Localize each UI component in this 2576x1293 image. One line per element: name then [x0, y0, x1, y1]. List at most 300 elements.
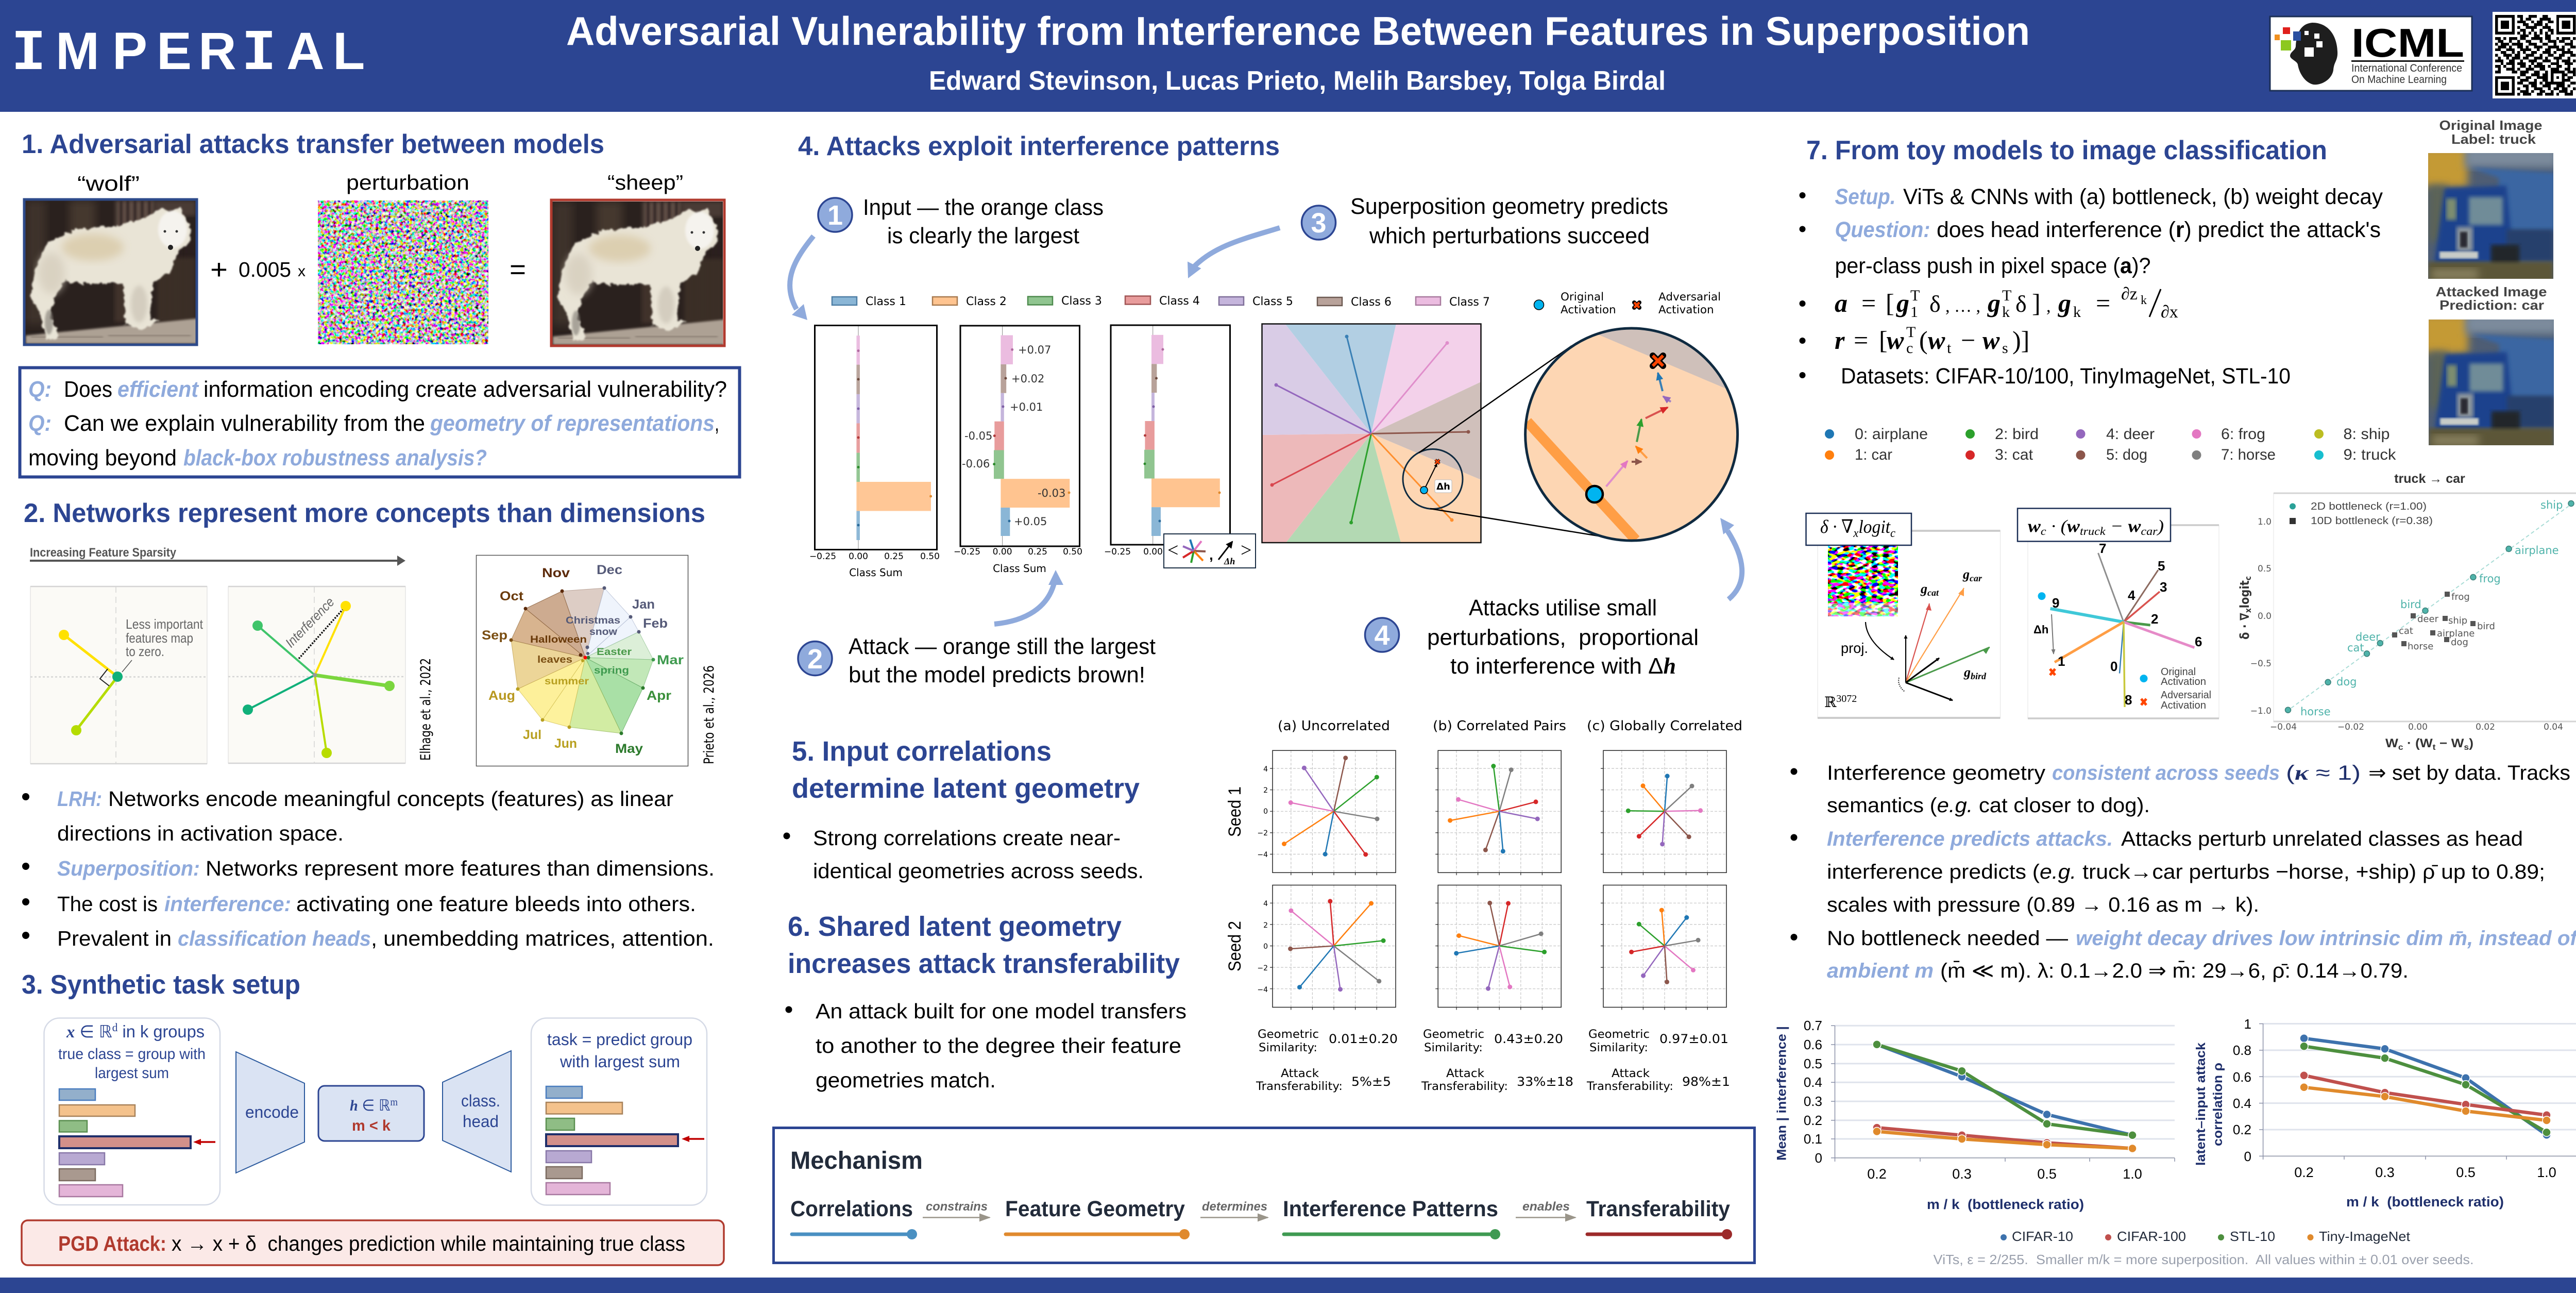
bar chart: attack: [954, 326, 1082, 575]
card: input groups: [44, 1018, 220, 1205]
logo: ICML: On Machine Learning: [2351, 74, 2447, 86]
stats: globally correlated: Similarity:: [1589, 1042, 1648, 1054]
y ticks: 4: [1263, 765, 1268, 774]
legend: activations: Original: [1561, 291, 1604, 304]
bar chart: attack: Class Sum: [993, 562, 1046, 575]
step 2 text: but the model predicts brown!: [849, 662, 1145, 687]
formula: a: g: [1896, 289, 1909, 317]
label wolf: “wolf”: [77, 172, 140, 195]
legend: classes: Class 4: [1159, 295, 1200, 308]
scatter plot: truck to car: δ · ∇: [2238, 609, 2252, 640]
y ticks: −2: [1257, 964, 1268, 972]
formula: a: k: [2141, 294, 2147, 307]
diagram: gradient projection: g: [1964, 665, 1971, 680]
callout: research questions: geometry of representations: [430, 411, 715, 436]
diagram: gradient projection: c: [1890, 527, 1895, 540]
legend: CIFAR classes: 4: deer: [2106, 426, 2155, 443]
stats: uncorrelated: Transferability:: [1256, 1080, 1343, 1093]
scatter plot: truck to car: horse: [2300, 706, 2331, 718]
bar chart: attack: -0.03: [1038, 487, 1065, 499]
diagram: head weights star: Δh: [2033, 623, 2048, 636]
setup bullets: Setup.: [1835, 184, 1896, 209]
diagram: gradient projection: [1806, 513, 2000, 718]
diagram: gradient projection: logit: [1858, 516, 1891, 537]
bar chart: attacked model: 0.00: [1143, 547, 1163, 557]
formula: a: ,: [2046, 297, 2050, 316]
chart: calendar feature geometry: Mar: [657, 653, 684, 667]
step 3 text: which perturbations succeed: [1369, 223, 1650, 248]
callout: PGD attack: PGD Attack:: [58, 1232, 166, 1255]
logo: Imperial wordmark: P: [112, 22, 147, 80]
bullet list: concepts: activating one feature bleeds into others.: [296, 892, 696, 916]
step 2 text: [849, 634, 1156, 687]
logo: ICML: [2270, 16, 2472, 91]
diagram: gradient projection: 3072: [1836, 693, 1857, 704]
formula: r: s: [2002, 340, 2008, 357]
scatter plot: truck to car: truck → car: [2394, 472, 2465, 486]
logo: Imperial wordmark: E: [157, 22, 192, 80]
formula: r: )]: [2012, 326, 2029, 355]
classification head trapezoid: class.: [461, 1092, 500, 1110]
findings bullets: ⇒ set by data. Tracks: [2368, 762, 2570, 784]
formula: a: ∂x: [2161, 303, 2178, 322]
legend: datasets: Tiny-ImageNet: [2319, 1229, 2411, 1244]
chart: calendar feature geometry: Jan: [632, 597, 655, 612]
panel 5: input correlations: [783, 736, 1144, 883]
callout: research questions: black-box robustness analysis?: [183, 445, 487, 471]
formula: a: δ: [2015, 291, 2027, 317]
diagram: gradient projection: δ · ∇: [1820, 516, 1856, 537]
line chart: attack correlation: 0.3: [2375, 1165, 2395, 1180]
chart: calendar feature geometry: Christmas: [566, 615, 620, 626]
line chart: attack correlation: correlation ρ: [2211, 1063, 2225, 1146]
stats: uncorrelated: 5%±5: [1351, 1074, 1391, 1089]
diagram: five features in superposition: Interference: [282, 594, 337, 650]
diagram: head weights star: car: [2141, 525, 2158, 538]
arrow 3: [1188, 228, 1280, 278]
stats: uncorrelated: Attack: [1281, 1067, 1319, 1080]
bar chart: input: Class Sum: [849, 566, 903, 579]
legend: classes: Class 2: [966, 295, 1007, 308]
formula: a: [: [1886, 289, 1894, 317]
diagram: head weights star: w: [2128, 517, 2141, 536]
formula: r: (: [1919, 326, 1928, 355]
line chart: attack correlation: 1: [2244, 1016, 2251, 1032]
formula: a: k: [2002, 304, 2010, 321]
heading 6: increases attack transferability: [788, 948, 1180, 979]
callout: research questions: Does: [64, 377, 112, 402]
diagram: head weights star: 3: [2160, 579, 2167, 595]
formula: r: =: [1854, 326, 1868, 355]
diagram: two-dimensional features: features map: [126, 630, 193, 646]
legend: CIFAR classes: 2: bird: [1995, 426, 2039, 443]
y ticks: −4: [1257, 851, 1268, 859]
scatter plot: truck to car: cat: [2399, 626, 2413, 636]
bar chart: input: −0.25: [809, 551, 836, 562]
legend: datasets: [2001, 1229, 2411, 1244]
bar chart: input: 0.50: [920, 551, 940, 562]
formula: r: T: [1906, 324, 1916, 341]
step: transferability: Transferability: [1586, 1197, 1730, 1221]
legend: datasets: CIFAR-100: [2117, 1229, 2186, 1244]
line chart: attack correlation: 0.6: [2233, 1069, 2251, 1085]
callout: research questions: Q:: [28, 411, 52, 436]
diagram: gradient projection: g: [1963, 567, 1970, 582]
column titles: [1278, 718, 1742, 734]
image: perturbation noise: [318, 200, 488, 344]
panel 4: attacks exploit interference: [790, 131, 1762, 687]
line chart: mean interference: 0.7: [1804, 1018, 1822, 1033]
scatter plot: truck to car: dog: [2451, 637, 2468, 648]
findings bullets: [1791, 761, 2576, 982]
scatter plot: truck to car: − W: [2436, 736, 2464, 750]
label perturbation: perturbation: [346, 171, 469, 194]
card: input groups: in k groups: [117, 1022, 205, 1041]
latent box: [318, 1086, 424, 1141]
line chart: attack correlation: 0: [2244, 1149, 2251, 1164]
heading 5: [792, 736, 1140, 804]
formula: a: ]: [2032, 289, 2041, 317]
scatter plot: truck to car: airplane: [2437, 628, 2475, 639]
callout: research questions: [20, 368, 740, 477]
scatter plot: truck to car: −0.5: [2250, 659, 2272, 669]
bullet list: concepts: The cost is: [57, 892, 158, 916]
diagram: head weights star: truck: [2080, 525, 2106, 538]
step 4 badge: [1365, 618, 1399, 652]
scatter plot: truck to car: −1.0: [2250, 706, 2272, 716]
scatter plot: truck to car: [2238, 472, 2576, 752]
bullet list: concepts: Superposition:: [57, 857, 200, 880]
callout: research questions: Can we explain vulnerability from the: [64, 411, 425, 436]
step: transferability: [1586, 1197, 1732, 1239]
inner product formula box: [1164, 534, 1256, 568]
legend: datasets: CIFAR-10: [2012, 1229, 2073, 1244]
y ticks: 0: [1263, 943, 1268, 951]
panel: seed geometry grid: [1225, 718, 1742, 1093]
chart: calendar feature geometry: Dec: [597, 563, 622, 577]
callout: PGD attack: [22, 1220, 724, 1265]
scatter plot: truck to car: 2D bottleneck (r=1.00): [2311, 501, 2427, 512]
logo: Imperial wordmark: L: [333, 22, 365, 80]
scatter plot: truck to car: 10D bottleneck (r=0.38): [2311, 515, 2433, 527]
classification head trapezoid: head: [463, 1112, 499, 1131]
findings bullets: Interference predicts attacks.: [1827, 828, 2113, 850]
encoder trapezoid: encode: [245, 1103, 299, 1121]
row labels: [1225, 786, 1245, 971]
formula: r: r: [1835, 326, 1845, 355]
diagram: head weights star: 1: [2058, 653, 2065, 669]
findings bullets: interference predicts ( e.g. truck→car perturbs −horse, +ship) ρ̄ up to 0.89;: [1827, 861, 2545, 883]
inner product formula box: <: [1167, 540, 1178, 561]
diagram: head weights star: · (: [2046, 517, 2069, 536]
latent box: m < k: [352, 1117, 391, 1134]
bullet list: concepts: Prevalent in: [57, 927, 172, 950]
image: attacked truck: Prediction: car: [2439, 297, 2544, 313]
chart: calendar feature geometry: Feb: [643, 616, 668, 631]
scatter plot: truck to car: ship: [2540, 499, 2563, 511]
logo: Imperial wordmark: M: [56, 22, 99, 80]
diagram: head weights star: Original: [2161, 666, 2196, 678]
legend: CIFAR classes: 1: car: [1855, 446, 1892, 463]
step: interference patterns: Interference Patterns: [1283, 1197, 1498, 1221]
equation signs: [210, 254, 526, 285]
step: interference patterns: [1283, 1197, 1500, 1239]
caption: ViTs, ε = 2/255. Smaller m/k = more superposition. All values within ± 0.01 over seeds.: [1933, 1252, 2474, 1267]
legend: datasets: STL-10: [2230, 1229, 2275, 1244]
panel 2: superposition: [22, 498, 717, 950]
panel 3: synthetic task setup: [22, 970, 724, 1265]
chart: calendar feature geometry: Apr: [647, 689, 671, 703]
encoder trapezoid: [236, 1052, 304, 1173]
legend: classes: Class 3: [1061, 295, 1102, 308]
latent box: h ∈ ℝ: [350, 1097, 392, 1114]
callout: research questions: information encoding create adversarial vulnerability?: [204, 377, 727, 402]
formula: r: w: [1982, 326, 2000, 355]
image: attacked truck: Attacked Image: [2436, 284, 2547, 299]
chart: calendar feature geometry: Halloween: [530, 634, 587, 645]
logo: ICML: ICML: [2351, 20, 2464, 65]
step 3 badge: 3: [1311, 208, 1327, 239]
y ticks: −2: [1257, 829, 1268, 837]
scatter plot: truck to car: s: [2464, 743, 2469, 752]
zoom connectors: [1419, 346, 1608, 538]
arrow: enables: [1516, 1200, 1575, 1217]
logo: Imperial wordmark: R: [198, 22, 236, 80]
diagram: gradient projection: bird: [1971, 671, 1987, 681]
arrow 1: [790, 236, 814, 320]
step: feature geometry: [1005, 1197, 1190, 1239]
formula: a: 1: [1910, 304, 1918, 321]
bar chart: input: [809, 326, 940, 579]
logo: Imperial wordmark: A: [286, 22, 325, 80]
legend: activations: Adversarial: [1658, 291, 1721, 304]
plot: decision regions: [1262, 324, 1481, 543]
line chart: mean interference: 0.5: [2037, 1166, 2057, 1182]
plot: correlated pairs seed 2: [1435, 885, 1561, 1010]
findings bullets: (m̄ ≪ m). λ: 0.1→2.0 ⇒ m̄: 29→6, ρ̄: 0.14→0.79.: [1940, 960, 2409, 982]
legend: CIFAR classes: 7: horse: [2221, 446, 2276, 463]
diagram: head weights star: c: [2041, 525, 2046, 538]
bullet: transfer: [785, 999, 1187, 1092]
plot: uncorrelated seed 2: [1270, 885, 1396, 1010]
diagram: head weights star: 5: [2158, 558, 2165, 574]
line chart: attack correlation: 0.5: [2456, 1165, 2476, 1180]
panel 1: adversarial attacks transfer: [20, 129, 740, 477]
formula: r: −: [1961, 326, 1975, 355]
bullet list: concepts: classification heads: [178, 927, 371, 950]
legend: classes: Class 1: [866, 295, 906, 308]
bullet: correlations: Strong correlations create near-: [813, 826, 1121, 850]
setup bullets: does head interference (r) predict the attack's: [1937, 217, 2381, 242]
diagram: head weights star: ): [2156, 517, 2164, 536]
diagram: head weights star: −: [2106, 517, 2128, 536]
scatter plot: truck to car: 0.02: [2476, 722, 2495, 732]
findings bullets: scales with pressure (0.89 → 0.16 as m → k).: [1827, 894, 2259, 916]
equation signs: 0.005: [239, 258, 291, 281]
row labels: Seed 2: [1225, 921, 1245, 971]
chart: calendar feature geometry: May: [615, 742, 643, 756]
mechanism title: Mechanism: [790, 1147, 923, 1174]
setup bullets: ViTs & CNNs with (a) bottleneck, (b) weight decay: [1903, 184, 2383, 209]
formula: a: g: [2058, 289, 2071, 317]
column titles: (c) Globally Correlated: [1587, 718, 1742, 734]
scatter plot: truck to car: frog: [2451, 592, 2470, 602]
legend: CIFAR classes: 9: truck: [2343, 446, 2397, 463]
card: input groups: x ∈ ℝ: [66, 1022, 113, 1042]
bar chart: input: 0.25: [884, 551, 904, 562]
bar chart: attack: +0.02: [1011, 373, 1044, 385]
scatter plot: truck to car: W: [2385, 736, 2397, 750]
chart: calendar feature geometry: Aug: [488, 689, 515, 703]
heading 7: 7. From toy models to image classification: [1806, 136, 2327, 165]
legend: classes: Class 5: [1252, 295, 1293, 308]
step 2 badge: 2: [807, 644, 823, 675]
heading 5: determine latent geometry: [792, 773, 1140, 804]
line chart: attack correlation: latent–input attack: [2194, 1043, 2208, 1166]
bar chart: attack: -0.05: [964, 430, 992, 442]
citation Elhage: Elhage et al., 2022: [418, 658, 434, 761]
line chart: mean interference: 0.1: [1804, 1131, 1822, 1147]
scatter plot: truck to car: 0.5: [2258, 564, 2272, 574]
logo: ICML: International Conference: [2351, 62, 2462, 74]
stats: correlated pairs: Similarity:: [1424, 1042, 1483, 1054]
stats: correlated pairs: 33%±18: [1517, 1074, 1573, 1089]
line chart: mean interference: Mean | interference |: [1774, 1026, 1789, 1161]
logo: Imperial wordmark: I: [242, 21, 276, 87]
diagram: head weights star: 8: [2125, 692, 2132, 708]
formula: a: =: [2096, 289, 2110, 317]
scatter plot: truck to car: c: [2243, 576, 2253, 580]
legend: CIFAR classes: 3: cat: [1995, 446, 2033, 463]
line chart: mean interference: 0.5: [1804, 1056, 1822, 1071]
bar chart: attack: +0.01: [1010, 401, 1043, 413]
citation Prieto: Prieto et al., 2026: [701, 665, 717, 764]
arrow 4: [1720, 518, 1742, 599]
plot: correlated pairs seed 1: [1435, 750, 1561, 875]
panel 6: shared latent geometry: [785, 911, 1187, 1092]
step: correlations: [790, 1197, 917, 1239]
plot: globally correlated seed 2: [1601, 885, 1726, 1010]
chart: calendar feature geometry: leaves: [537, 654, 572, 665]
stats: uncorrelated: Geometric: [1258, 1028, 1319, 1041]
card: input groups: true class = group with: [58, 1046, 206, 1063]
chart: calendar feature geometry: Easter: [597, 647, 632, 658]
bullet: correlations: [783, 826, 1144, 883]
scatter plot: truck to car: bird: [2477, 621, 2495, 632]
heading 3: 3. Synthetic task setup: [22, 970, 300, 1000]
findings bullets: weight decay drives low intrinsic dim m̄, instead of: [2076, 927, 2576, 950]
diagram: gradient projection: cat: [1927, 587, 1939, 598]
inner product formula box: Δh: [1224, 556, 1235, 566]
stats: globally correlated: Geometric: [1588, 1028, 1650, 1041]
line chart: mean interference: 0.6: [1804, 1037, 1822, 1052]
heading 4: 4. Attacks exploit interference patterns: [798, 131, 1280, 161]
column titles: (a) Uncorrelated: [1278, 718, 1390, 734]
bar chart: attack: −0.25: [954, 547, 980, 557]
line chart: mean interference: 0.4: [1804, 1074, 1822, 1090]
scatter plot: truck to car: −0.04: [2270, 722, 2297, 732]
arrow: enables: enables: [1522, 1200, 1570, 1214]
heading 2: 2. Networks represent more concepts than dimensions: [24, 498, 705, 528]
stats: correlated pairs: Transferability:: [1421, 1080, 1508, 1093]
legend: CIFAR classes: [1825, 426, 2397, 463]
legend: activations: [1534, 291, 1721, 316]
logo: Imperial wordmark: I: [11, 21, 46, 87]
step 3 text: Superposition geometry predicts: [1350, 194, 1668, 219]
legend: CIFAR classes: 8: ship: [2343, 426, 2389, 443]
diagram: two-dimensional features: [30, 586, 207, 764]
formula: r: w: [1887, 326, 1904, 355]
panel: mechanism: [774, 1128, 1755, 1263]
stats: uncorrelated: [1256, 1028, 1398, 1093]
diagram: head weights star: Adversarial: [2161, 690, 2211, 701]
step 3 badge: [1301, 206, 1335, 240]
row labels: Seed 1: [1225, 786, 1245, 837]
scatter plot: truck to car: logit: [2238, 580, 2252, 608]
equation signs: =: [510, 254, 526, 285]
step 1 badge: [818, 198, 852, 232]
plot: uncorrelated seed 1: [1270, 750, 1396, 875]
findings bullets: No bottleneck needed —: [1827, 927, 2068, 950]
line chart: attack correlation: 0.2: [2294, 1165, 2314, 1180]
formula: r: [1835, 324, 2029, 357]
scatter plot: truck to car: 0.04: [2544, 722, 2563, 732]
stats: correlated pairs: 0.43±0.20: [1494, 1032, 1563, 1046]
chart: calendar feature geometry: Nov: [542, 566, 570, 580]
step 4 text: perturbations, proportional: [1427, 625, 1699, 650]
scatter plot: truck to car: c: [2398, 743, 2403, 752]
diagram: head weights star: 0: [2110, 659, 2117, 674]
authors: Edward Stevinson, Lucas Prieto, Melih Barsbey, Tolga Birdal: [929, 66, 1666, 96]
step 4 text: [1427, 595, 1699, 679]
setup bullets: Question:: [1835, 217, 1930, 242]
bar chart: attack: 0.25: [1028, 547, 1047, 557]
diagram: gradient projection: x: [1853, 527, 1859, 540]
findings bullets: semantics (e.g. cat closer to dog).: [1827, 794, 2150, 817]
scatter plot: truck to car: deer: [2417, 614, 2439, 625]
arrow: increasing feature sparsity: [30, 546, 405, 566]
inner product formula box: >: [1241, 540, 1251, 561]
formula: r: c: [1906, 340, 1913, 357]
line chart: mean interference: [1774, 1018, 2175, 1212]
step: correlations: Correlations: [790, 1197, 913, 1221]
setup bullets: [1799, 184, 2383, 389]
legend: classes: [832, 295, 1490, 309]
findings bullets: ambient m: [1827, 960, 1934, 982]
scatter plot: truck to car: · (W: [2403, 736, 2433, 750]
chart: calendar feature geometry: summer: [545, 676, 589, 687]
header band: [0, 0, 2576, 112]
bullet: transfer: An attack built for one model transfers: [816, 999, 1187, 1023]
diagram: gradient projection: g: [1921, 581, 1927, 596]
footer band: [0, 1278, 2576, 1293]
heading 6: 6. Shared latent geometry: [788, 911, 1122, 942]
label sheep: “sheep”: [607, 171, 683, 194]
stats: globally correlated: Transferability:: [1586, 1080, 1673, 1093]
y ticks: 4: [1263, 900, 1268, 908]
arrow: constrains: constrains: [926, 1200, 988, 1214]
bullet list: concepts: LRH:: [57, 787, 102, 811]
formula: a: [1835, 284, 2178, 322]
bullet: transfer: to another to the degree their feature: [816, 1034, 1181, 1057]
title: Adversarial Vulnerability from Interference Between Features in Superposition: [566, 8, 2030, 54]
step 1 text: Input — the orange class: [863, 195, 1104, 220]
heading 6: [788, 911, 1180, 979]
bar chart: attack: -0.06: [962, 458, 990, 470]
legend: activations: Activation: [1561, 304, 1616, 316]
plot: decision regions: Δh: [1436, 481, 1450, 492]
stats: uncorrelated: 0.01±0.20: [1329, 1032, 1398, 1046]
